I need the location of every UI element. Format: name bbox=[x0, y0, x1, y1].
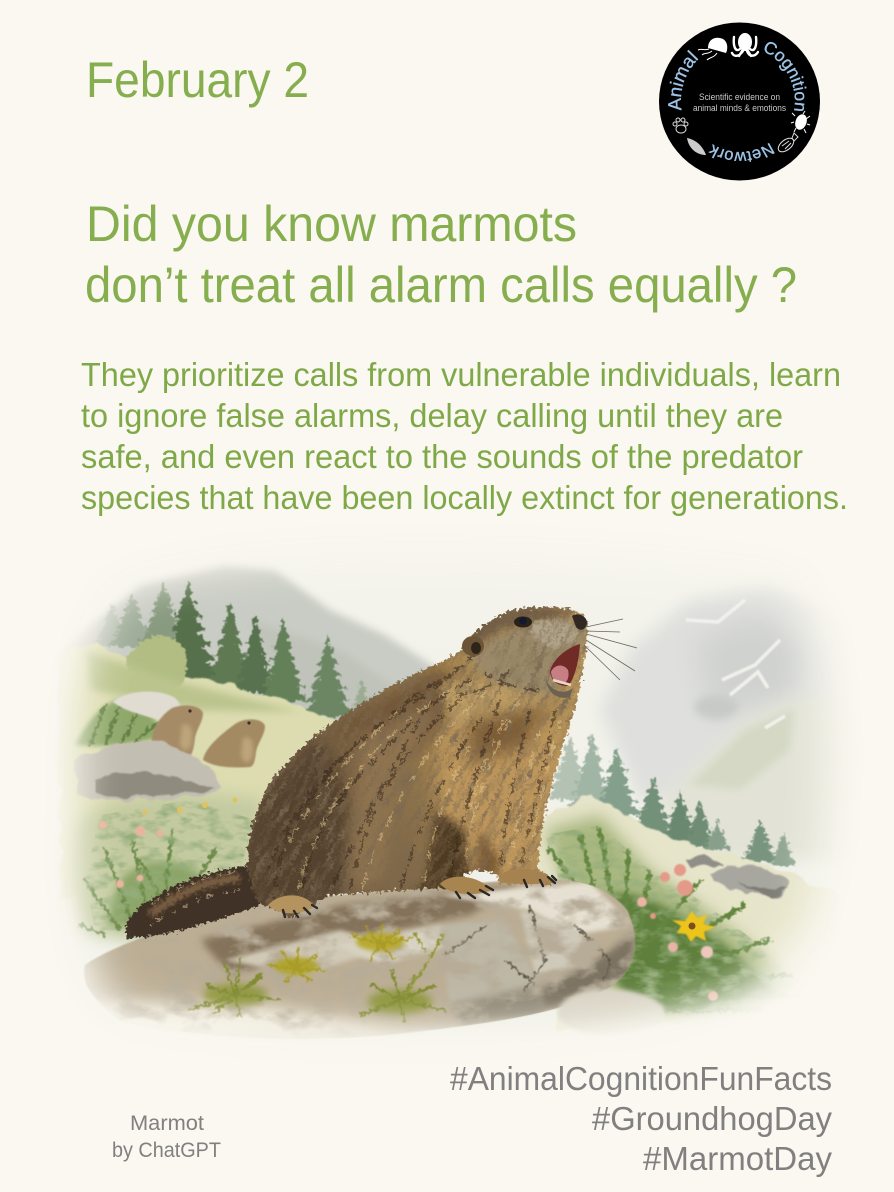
soft mist fade at bottom bbox=[182, 1008, 730, 1039]
logo ring text: Animal bbox=[668, 50, 698, 110]
meadow bush and shaded grass bbox=[85, 635, 300, 712]
main title: don’t treat all alarm calls equally ? bbox=[85, 257, 797, 313]
body paragraph: species that have been locally extinct for generations. bbox=[81, 480, 848, 517]
front foot left bbox=[440, 877, 493, 898]
grass tuft left bbox=[75, 699, 160, 746]
hillside meadow right bbox=[520, 795, 840, 1030]
logo icon: beetle bbox=[791, 111, 810, 133]
hashtags: #MarmotDay bbox=[643, 1141, 832, 1178]
small marmot left bbox=[152, 705, 203, 758]
logo tagline bbox=[693, 92, 786, 113]
logo ring text: Cognition bbox=[764, 42, 806, 111]
small marmot right bbox=[203, 719, 265, 767]
main title: Did you know marmots bbox=[86, 196, 577, 252]
background pine trees left bbox=[92, 582, 377, 718]
body paragraph bbox=[81, 357, 848, 517]
boulder left bbox=[75, 742, 222, 800]
hillside meadow left bbox=[60, 645, 356, 900]
body paragraph: to ignore false alarms, delay calling until they are bbox=[81, 398, 783, 435]
logo tagline: animal minds & emotions bbox=[693, 103, 786, 113]
hashtags: #GroundhogDay bbox=[592, 1101, 832, 1138]
logo ring text: Network bbox=[708, 142, 775, 162]
hashtags bbox=[450, 1061, 832, 1178]
body bbox=[245, 606, 590, 918]
fur colouring bbox=[245, 606, 590, 916]
tail bbox=[126, 866, 262, 938]
logo: Animal Cognition Network bbox=[659, 22, 820, 180]
large foreground grass right bbox=[540, 815, 805, 1020]
logo tagline: Scientific evidence on bbox=[699, 92, 780, 102]
hashtags: #AnimalCognitionFunFacts bbox=[450, 1061, 832, 1098]
ear bbox=[462, 636, 484, 656]
whiskers bbox=[584, 619, 637, 680]
grass and flowers lower left bbox=[68, 790, 265, 945]
nose bbox=[572, 614, 587, 630]
eye bbox=[514, 616, 532, 628]
logo icon: paw bbox=[673, 118, 688, 133]
body paragraph: They prioritize calls from vulnerable individuals, learn bbox=[81, 357, 841, 394]
yellow flower bbox=[672, 911, 715, 942]
date heading: February 2 bbox=[86, 52, 309, 108]
lower rock bbox=[558, 989, 665, 1036]
foreground rock and ground bbox=[84, 879, 640, 1045]
illustration: marmot calling on a rock bbox=[58, 563, 836, 1038]
distant mountains bbox=[60, 565, 860, 860]
right background pine trees bbox=[545, 733, 797, 865]
logo icon: octopus bbox=[732, 33, 758, 56]
body paragraph: safe, and even react to the sounds of the predator bbox=[81, 439, 803, 476]
fur streaks dark bbox=[268, 650, 555, 900]
open mouth bbox=[546, 644, 580, 698]
image credit bbox=[112, 1112, 221, 1162]
distant boulders right bbox=[683, 853, 790, 897]
hind foot bbox=[268, 895, 317, 917]
pink flowers right bbox=[637, 864, 718, 1001]
image credit: by ChatGPT bbox=[112, 1139, 221, 1162]
fur streaks light bbox=[285, 690, 560, 895]
front foot right bbox=[498, 869, 556, 887]
logo ring text bbox=[668, 42, 806, 162]
background boulder bbox=[113, 692, 181, 722]
moss tufts on rock bbox=[190, 925, 445, 1022]
logo icon: fish bbox=[776, 133, 798, 154]
logo icon: jellyfish bbox=[698, 38, 727, 60]
sky bbox=[107, 709, 802, 1022]
small marmots bbox=[152, 705, 265, 767]
marmot bbox=[124, 606, 638, 940]
main title bbox=[85, 196, 797, 313]
logo icon: feather bbox=[687, 138, 706, 155]
image credit: Marmot bbox=[130, 1112, 204, 1135]
